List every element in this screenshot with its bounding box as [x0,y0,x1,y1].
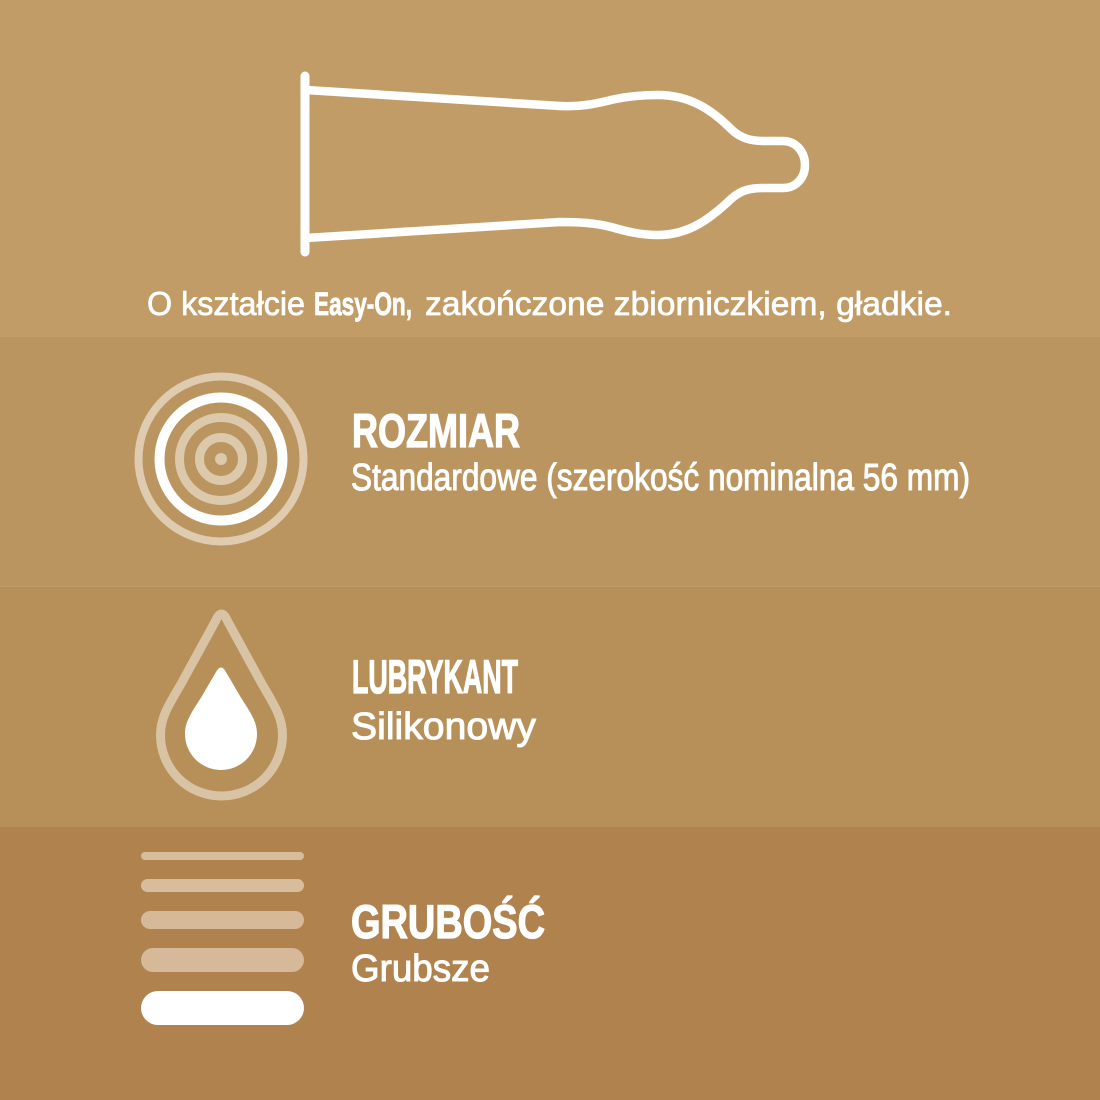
description text: zakończone zbiorniczkiem, gładkie. [425,285,952,322]
icon: product outline [305,76,805,252]
size heading: ROZMIAR [352,404,520,457]
panel: size [0,337,1100,586]
panel: shape [0,0,1100,337]
lubricant heading: LUBRYKANT [352,650,518,703]
description text: O kształcie [147,285,305,322]
icon: concentric rings [138,376,304,542]
panel: thickness [0,827,1100,1100]
description text: Easy-On, [314,286,412,322]
thickness value: Grubsze [351,948,490,990]
icon: thickness bars [141,852,304,1025]
lubricant value: Silikonowy [351,706,536,748]
description text [147,285,952,322]
thickness heading: GRUBOŚĆ [351,895,545,948]
icon: droplet [160,614,282,796]
panel: lubricant [0,587,1100,827]
size value: Standardowe (szerokość nominalna 56 mm) [351,457,970,499]
